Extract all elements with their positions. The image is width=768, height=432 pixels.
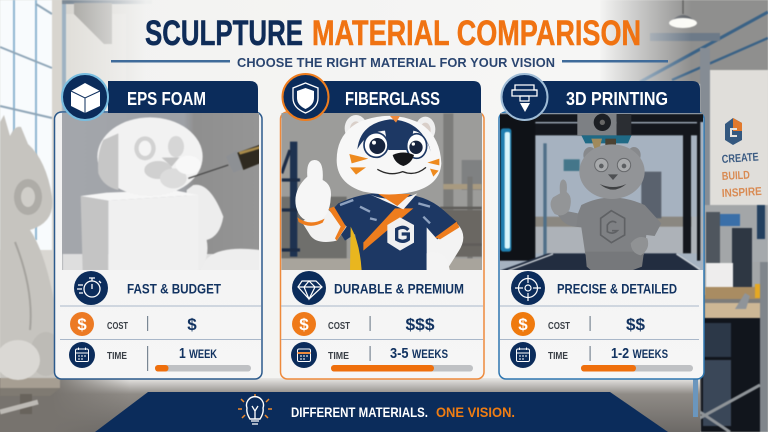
panel: 3D printing xyxy=(498,74,705,379)
row: cost: $$$ xyxy=(406,315,435,334)
icon: target xyxy=(515,275,541,301)
row: time xyxy=(510,342,693,372)
title xyxy=(145,14,641,53)
row: time xyxy=(291,342,473,372)
footer banner xyxy=(95,392,668,432)
row: cost: COST xyxy=(548,320,570,332)
row: cost: $ xyxy=(187,315,197,334)
header: 3D printing: 3D PRINTING xyxy=(566,89,668,109)
icon: G logo xyxy=(725,118,742,145)
row: durable and premium xyxy=(292,271,464,305)
row: cost xyxy=(511,312,646,336)
row: cost: COST xyxy=(328,320,350,332)
footer banner: ONE VISION. xyxy=(436,404,515,420)
poster: create build inspire: BUILD xyxy=(722,170,750,183)
photo: carved foam mascot xyxy=(62,113,259,270)
title: MATERIAL COMPARISON xyxy=(312,14,641,53)
row: durable and premium: DURABLE & PREMIUM xyxy=(334,280,464,296)
header: fiberglass xyxy=(306,81,481,113)
panel: fiberglass xyxy=(280,74,487,379)
row: fast and budget xyxy=(74,271,221,305)
row: precise and detailed: PRECISE & DETAILED xyxy=(557,280,677,296)
row: precise and detailed xyxy=(511,271,677,305)
row: time: 3-5 WEEKS xyxy=(390,345,448,362)
row: time xyxy=(69,342,251,372)
icon: stopwatch xyxy=(77,278,101,297)
poster: create build inspire xyxy=(721,118,762,200)
large foam statue xyxy=(0,115,62,414)
icon: print nozzle xyxy=(502,74,548,120)
row: cost: $ xyxy=(518,315,528,334)
row: cost: $ xyxy=(77,315,87,334)
poster: create build inspire: CREATE xyxy=(721,151,759,166)
icon: shield xyxy=(282,74,328,120)
icon: calendar xyxy=(298,349,310,362)
lower right workshop xyxy=(640,205,768,432)
icon: calendar xyxy=(516,348,530,362)
panel: EPS foam xyxy=(54,74,267,379)
right factory wall xyxy=(600,0,768,238)
icon: foam cube xyxy=(62,74,108,120)
header: 3D printing xyxy=(524,81,700,113)
row: time: 1 WEEK xyxy=(179,345,218,362)
photo: 3D printed mascot xyxy=(498,110,705,277)
row: fast and budget: FAST & BUDGET xyxy=(127,280,221,296)
row: cost xyxy=(292,312,435,336)
ceiling lamp xyxy=(669,0,697,28)
header: EPS foam: EPS FOAM xyxy=(127,89,206,109)
header: EPS foam xyxy=(108,81,258,113)
row: cost: COST xyxy=(107,320,128,332)
row: time: TIME xyxy=(548,350,568,362)
row: time: 1-2 WEEKS xyxy=(611,345,668,362)
row: time: TIME xyxy=(107,350,127,362)
row: cost: $$ xyxy=(626,315,646,334)
floor xyxy=(0,378,700,432)
subtitle with rules: CHOOSE THE RIGHT MATERIAL FOR YOUR VISION xyxy=(237,55,555,70)
icon: light bulb xyxy=(238,394,272,424)
row: time: TIME xyxy=(328,350,349,362)
poster: create build inspire: INSPIRE xyxy=(722,186,762,200)
left window xyxy=(0,0,152,250)
icon: calendar xyxy=(76,348,88,362)
title: SCULPTURE xyxy=(145,14,303,53)
footer banner: DIFFERENT MATERIALS. xyxy=(291,404,428,420)
photo: painted fiberglass mascot xyxy=(280,110,487,277)
row: cost: $ xyxy=(299,315,309,334)
row: cost xyxy=(70,312,197,336)
header: fiberglass: FIBERGLASS xyxy=(345,89,440,109)
icon: diamond xyxy=(298,281,322,299)
